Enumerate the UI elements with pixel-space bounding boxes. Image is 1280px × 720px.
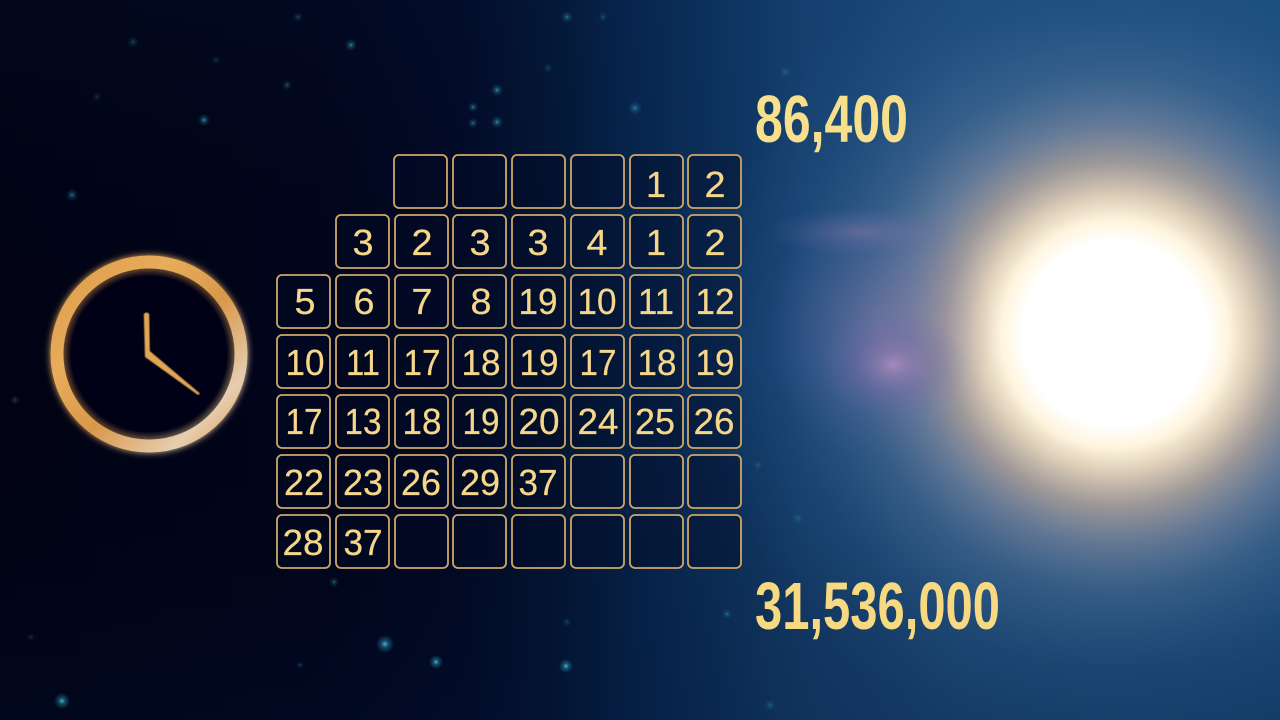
- row 6: 29: [460, 462, 500, 503]
- row 3: 6: [354, 281, 374, 322]
- row 5: 13: [344, 401, 382, 442]
- row 2: 4: [586, 222, 608, 263]
- row 1: 2: [704, 164, 726, 205]
- seconds in a year: 31,536,000: [755, 569, 1000, 644]
- row 5: 26: [694, 401, 734, 442]
- lens flare: [765, 200, 995, 460]
- row 2: 2: [412, 222, 432, 263]
- row 5: 17: [286, 401, 322, 442]
- row 3: 12: [696, 281, 734, 322]
- row 6: 22: [284, 462, 324, 503]
- row 4: 17: [404, 342, 440, 383]
- row 6: 23: [343, 462, 383, 503]
- row 4: 19: [696, 342, 734, 383]
- row 3: 19: [518, 281, 558, 322]
- sun glow: [600, 0, 1280, 720]
- row 6: 26: [401, 462, 441, 503]
- row 1: [394, 155, 741, 208]
- clock hands: [144, 312, 200, 395]
- row 7: 37: [344, 522, 382, 563]
- row 5: 20: [518, 401, 560, 442]
- row 4: 19: [520, 342, 558, 383]
- row 7: 28: [282, 522, 324, 563]
- row 3: 10: [578, 281, 616, 322]
- row 3: 11: [638, 281, 674, 322]
- row 3: 8: [470, 281, 492, 322]
- row 4: 17: [580, 342, 616, 383]
- row 4: 18: [462, 342, 500, 383]
- row 5: 19: [462, 401, 500, 442]
- row 2: 3: [470, 222, 490, 263]
- row 2: 3: [528, 222, 548, 263]
- row 3: 5: [294, 281, 316, 322]
- row 5: 25: [635, 401, 675, 442]
- row 3: 7: [412, 281, 432, 322]
- row 4: 18: [638, 342, 676, 383]
- row 5: 18: [402, 401, 442, 442]
- row 2: [336, 215, 741, 268]
- row 6: [277, 455, 741, 508]
- seconds in a day: 86,400: [755, 82, 908, 157]
- row 6: 37: [518, 462, 558, 503]
- clock ring: [57, 262, 241, 446]
- row 3: [277, 275, 741, 328]
- calendar grid: [277, 155, 741, 568]
- row 2: 1: [646, 222, 666, 263]
- row 4: [277, 335, 741, 388]
- row 5: [277, 395, 741, 448]
- row 7: [277, 515, 741, 568]
- row 1: 1: [646, 164, 666, 205]
- row 4: 10: [286, 342, 324, 383]
- row 5: 24: [578, 401, 618, 442]
- background stars: [10, 11, 804, 711]
- row 4: 11: [346, 342, 380, 383]
- row 2: 3: [352, 222, 374, 263]
- clock icon: [57, 262, 241, 446]
- row 2: 2: [704, 222, 726, 263]
